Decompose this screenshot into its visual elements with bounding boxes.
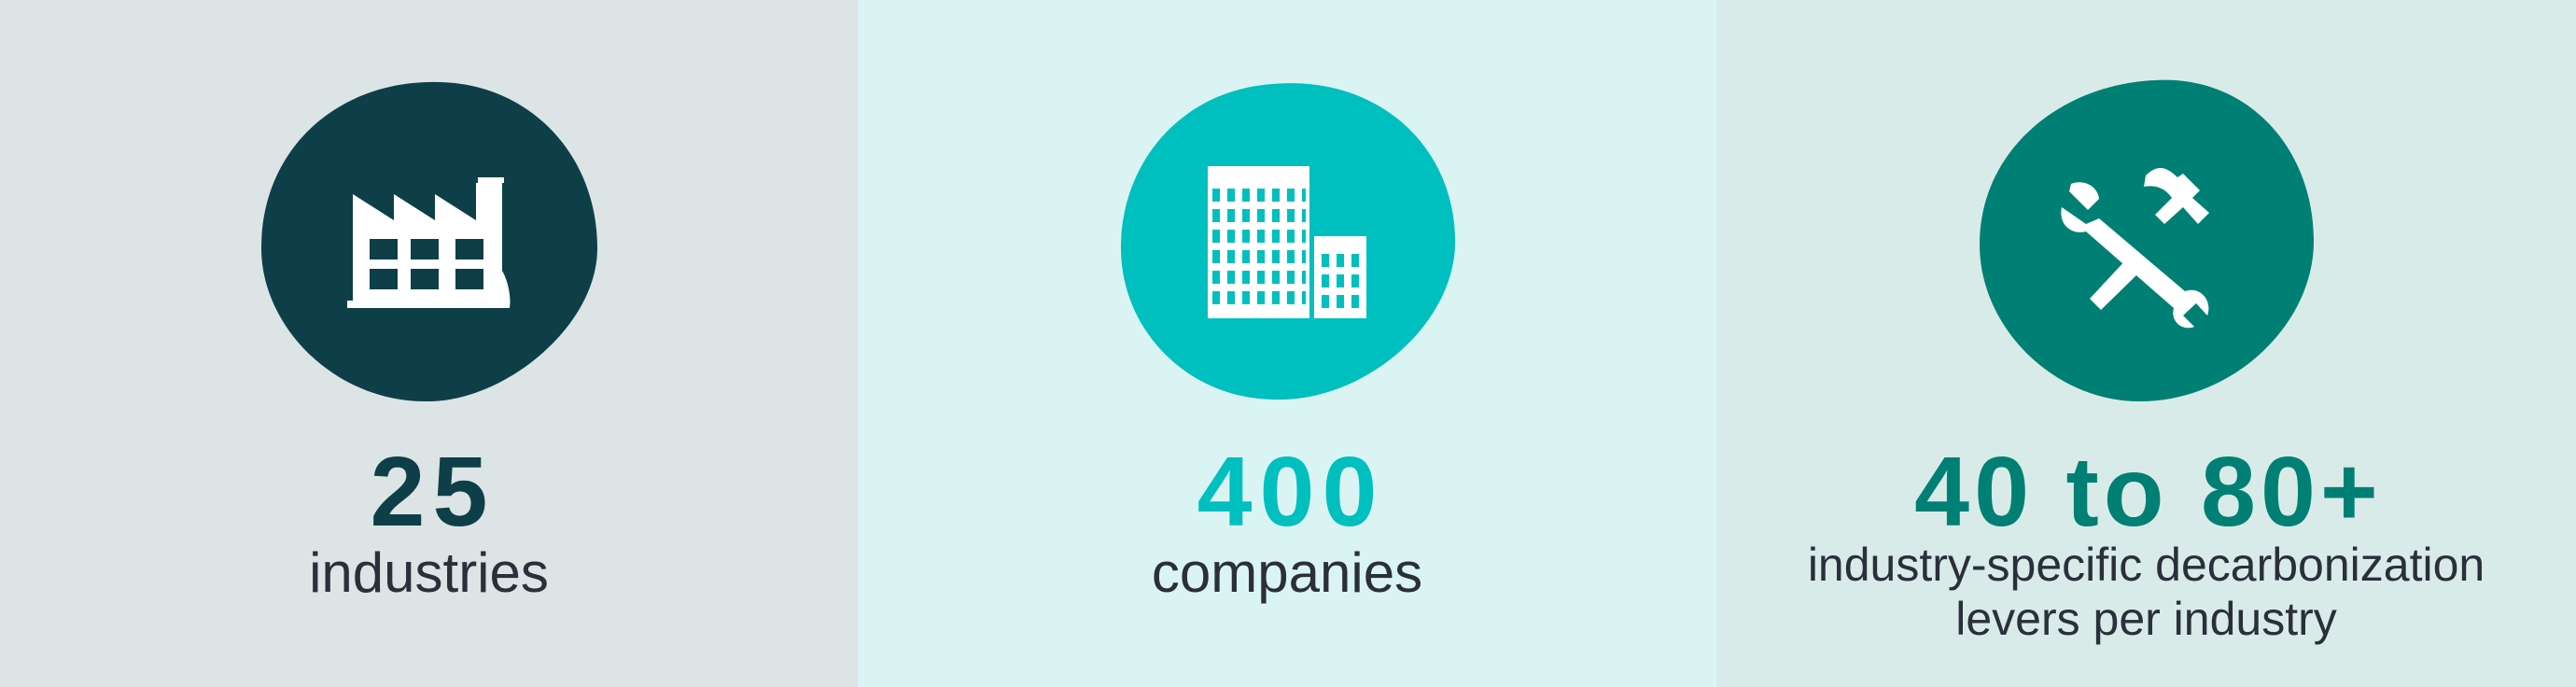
label: industries: industries [309,541,549,604]
number: 40 to 80+: 40 to 80+ [1914,437,2383,547]
label: levers text: industry-specific decarbonization [1808,539,2485,591]
label: companies: companies [1152,541,1422,604]
icon: building blob [1120,83,1456,400]
panel: industries [0,0,858,687]
icon: factory blob [261,82,597,401]
icon: tools blob [1980,80,2314,401]
number: 400: 400 [1197,437,1384,547]
label: levers text [1808,539,2485,645]
panel: companies [858,0,1716,687]
number: 25: 25 [371,437,495,547]
panel: levers [1716,0,2576,687]
label: levers text: levers per industry [1955,593,2337,645]
